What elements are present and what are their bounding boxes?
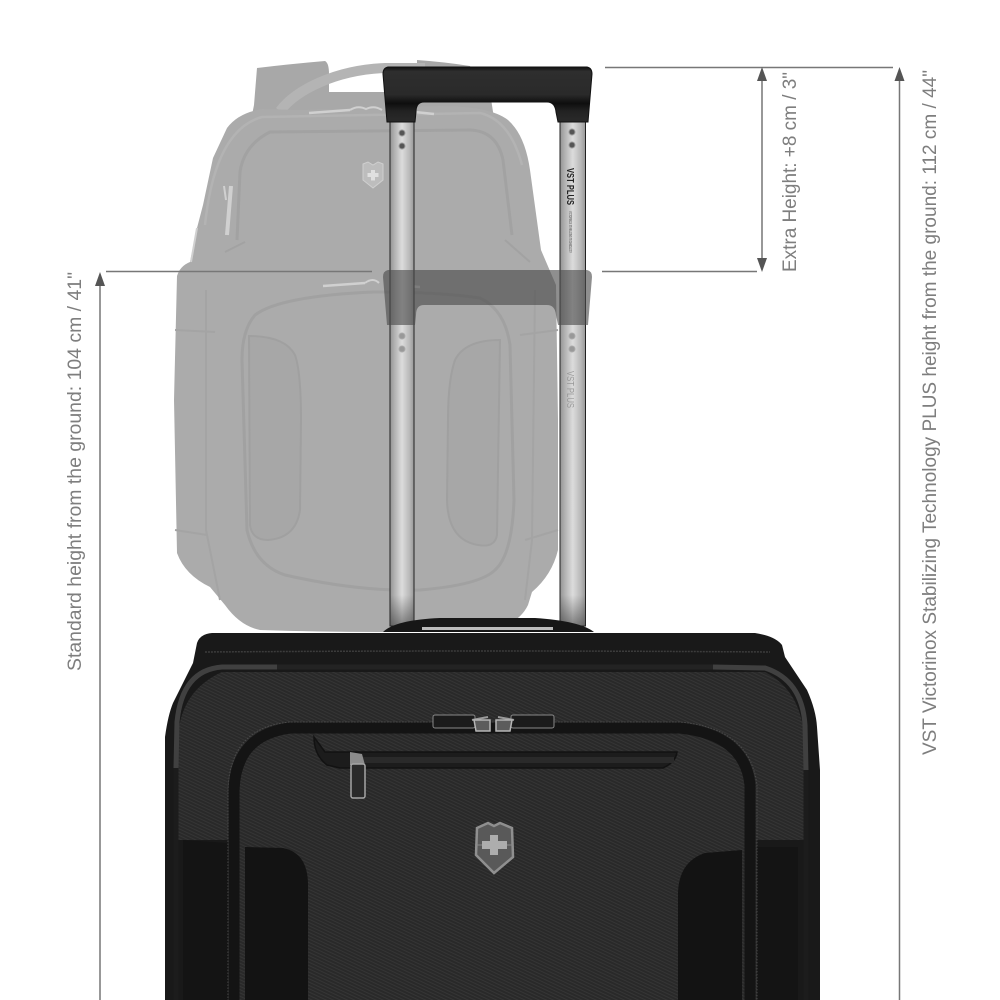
lowered handle grip (ghosted) — [383, 270, 592, 325]
logo shield — [475, 823, 513, 873]
extra height dimension — [602, 67, 893, 272]
standard height arrow — [95, 272, 105, 1000]
lower side patches — [183, 840, 798, 1000]
suitcase top handle — [383, 618, 594, 632]
right side pad — [678, 850, 742, 1000]
piping — [176, 667, 806, 1000]
backpack zip pulls — [191, 107, 434, 287]
suitcase — [165, 618, 820, 1000]
right pole — [560, 110, 586, 626]
backpack side pads — [249, 336, 500, 546]
pole label: VST PLUS — [564, 168, 575, 205]
full height label: VST Victorinox Stabilizing Technology PLUS height from the ground: 112 cm / 44" — [920, 70, 941, 755]
backpack upper logo shield — [363, 162, 383, 188]
main zip pulls — [433, 715, 554, 731]
backpack shoulder straps — [250, 60, 495, 125]
standard height extension line — [106, 270, 372, 272]
extra height label: Extra Height: +8 cm / 3" — [780, 72, 801, 272]
full height arrow — [894, 67, 904, 1000]
trolley poles: VICTORINOX STABILIZING TECHNOLOGY — [568, 211, 573, 253]
extra height arrow — [757, 67, 767, 272]
front panel piping — [228, 722, 757, 1000]
pole screws — [399, 129, 575, 149]
lower centre fabric — [228, 840, 757, 1000]
backpack body — [174, 106, 558, 632]
standard height label: Standard height from the ground: 104 cm / 41" — [65, 272, 86, 671]
backpack upper pocket — [205, 113, 530, 262]
extra height bottom line — [602, 270, 757, 272]
lowered position screws — [399, 333, 575, 352]
backpack carry handle — [280, 68, 425, 111]
suitcase body — [165, 633, 820, 1000]
pole base shadows — [390, 595, 586, 626]
extended handle grip — [383, 67, 592, 122]
full height dimension — [894, 67, 941, 1000]
lowered pole label: VST PLUS — [564, 371, 575, 408]
backpack lower pocket — [175, 290, 558, 600]
trolley poles — [390, 110, 586, 626]
standard height dimension — [65, 272, 372, 1000]
pocket zip pull — [350, 752, 365, 798]
left side pad — [245, 847, 308, 1000]
extra height top line — [605, 66, 893, 68]
top zipper seam — [205, 651, 770, 652]
left pole — [390, 110, 414, 626]
suitcase fabric — [178, 672, 804, 840]
backpack silhouette (ghosted) — [174, 60, 558, 632]
front pocket zipper — [314, 737, 677, 768]
